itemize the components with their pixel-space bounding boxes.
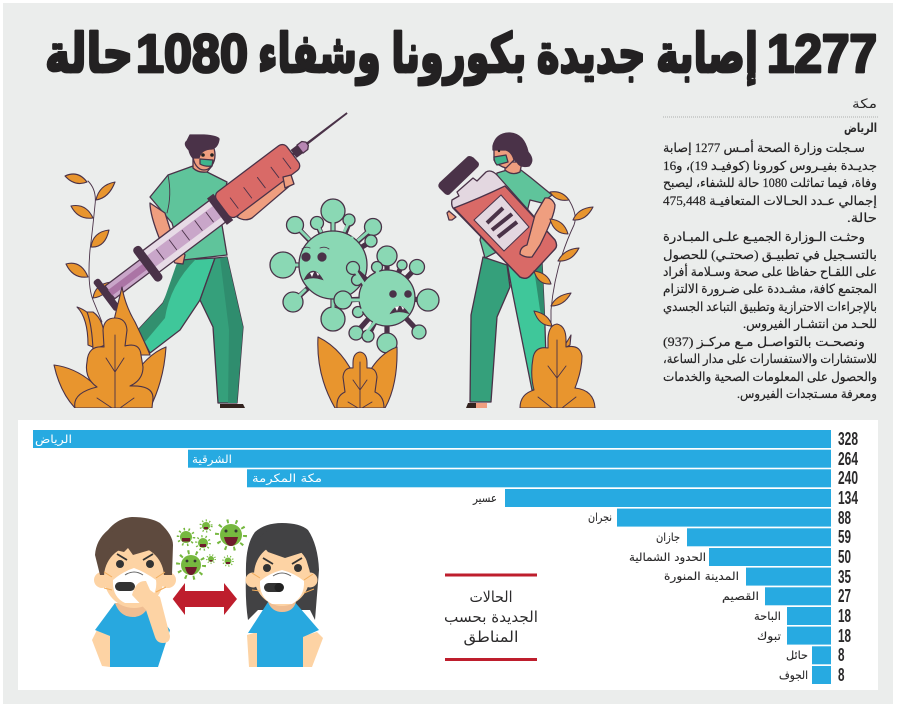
text block: article body: إجمالي عـدد الحـالات المتعافيـة 475,448	[663, 194, 877, 208]
bar chart: new cases by region: 134	[838, 487, 858, 508]
bar chart: new cases by region: القصيم	[722, 589, 759, 603]
bar chart: new cases by region: عسير	[472, 491, 497, 506]
text block: article body: حالة.	[847, 211, 877, 225]
icon: middle orange plant	[318, 337, 397, 408]
text block: article body: سـجلت وزارة الصحة أمـس 1277 إصابة	[663, 139, 865, 156]
icon: woman's trousers	[466, 257, 547, 408]
icon: right orange plant	[520, 324, 595, 408]
text block: article body: وفاة، فيما تماثلت 1080 حالة للشفاء، ليصبح	[663, 176, 877, 191]
text block: article body: للحـد من انتشـار الفيروس.	[743, 317, 877, 332]
text block: article body: وحثـت الـوزارة الجميـع علـى المبـادرة	[663, 230, 865, 245]
icon: woman's arms	[447, 198, 555, 257]
icon: left vine	[65, 174, 115, 322]
text block: article body: المجتمع كافة، مشـددة على ضـرورة الالتزام	[663, 282, 877, 297]
panel: chart background	[18, 420, 878, 690]
text block: article byline	[663, 97, 878, 135]
bar chart: new cases by region: نجران	[588, 510, 612, 525]
chart caption: المناطق	[464, 628, 518, 646]
icon: large virus	[270, 199, 382, 331]
icon: girl with mask	[246, 523, 323, 667]
text block: article body: على اللقـاح حفاظا على صحة وسـلامة أفراد	[663, 263, 877, 280]
icon: woman's head with mask	[493, 133, 532, 174]
text block: article body: بالتسـجيل في تطبيـق (صحتـي) للحصول	[663, 248, 877, 263]
bar chart: new cases by region: الشرقية	[192, 452, 232, 467]
text block: article body: للاستشارات والاستفسارات على مدار الساعة،	[663, 352, 877, 367]
bar chart: new cases by region: تبوك	[757, 629, 781, 644]
text block: article body: جديـدة بفيـروس كورونا (كوفيـد 19)، و16	[663, 159, 877, 174]
bar chart: new cases by region: 8	[838, 644, 844, 665]
bar chart: new cases by region: 18	[838, 605, 851, 626]
icon: coughing boy	[92, 517, 176, 667]
bar chart: new cases by region: 88	[838, 507, 851, 528]
bar chart: new cases by region: المدينة المنورة	[664, 569, 739, 584]
bar chart: new cases by region	[33, 428, 858, 685]
bar chart: new cases by region: 8	[838, 664, 844, 685]
bar chart: new cases by region: مكة المكرمة	[252, 471, 322, 486]
text block: article byline: الرياض	[844, 120, 877, 135]
text block: article body	[663, 139, 877, 402]
bar chart: new cases by region: 18	[838, 625, 851, 646]
text block: article body: ومعرفة مسـتجدات الفيروس.	[737, 387, 877, 402]
icon: man's trousers	[138, 257, 245, 408]
bar chart: new cases by region: 328	[838, 428, 858, 449]
icon: green germs	[178, 520, 245, 578]
bar chart: new cases by region: جازان	[656, 530, 680, 545]
chart caption: الجديدة بحسب	[444, 608, 538, 626]
icon: giant syringe	[94, 112, 348, 311]
bar chart: new cases by region: 35	[838, 566, 851, 587]
icon: vaccine bottle	[439, 157, 556, 278]
bar chart: new cases by region: 27	[838, 585, 851, 606]
title: 1277	[767, 24, 877, 84]
bar chart: new cases by region: 50	[838, 546, 851, 567]
icon: double-headed distance arrow	[173, 583, 237, 615]
icon: woman's shirt	[480, 167, 552, 258]
icon: left orange plant	[54, 287, 166, 408]
illustration: vaccination scene	[54, 97, 595, 408]
text block: article body: ونصحـت بالتواصـل مـع مركـز (937)	[663, 335, 865, 350]
icon: man's shirt and arms	[150, 166, 293, 264]
bar chart: new cases by region: 59	[838, 526, 851, 547]
icon: small virus	[334, 246, 439, 353]
title: حالة	[45, 24, 133, 84]
bar chart: new cases by region: 240	[838, 467, 858, 488]
bar chart: new cases by region: الحدود الشمالية	[629, 550, 706, 565]
bar chart: new cases by region: 264	[838, 448, 858, 469]
icon: man's hands	[283, 175, 294, 188]
bar chart: new cases by region: الباحة	[754, 609, 781, 623]
bar chart: new cases by region: الجوف	[779, 668, 808, 683]
chart caption: الحالات	[470, 588, 512, 606]
bar chart: new cases by region: حائل	[786, 648, 808, 662]
icon: right vine	[534, 192, 593, 330]
icon: man's head with mask	[185, 135, 219, 172]
chart caption	[444, 574, 538, 661]
title: 1080	[136, 24, 248, 84]
bar chart: new cases by region: الرياض	[35, 432, 72, 447]
text block: article body: بالإجراءات الاحترازية وتطبيق التباعد الجسدي	[663, 300, 877, 315]
text block: article byline: مكة	[852, 97, 877, 112]
text block: article body: والحصول على المعلومات الصحية والخدمات	[663, 370, 877, 385]
